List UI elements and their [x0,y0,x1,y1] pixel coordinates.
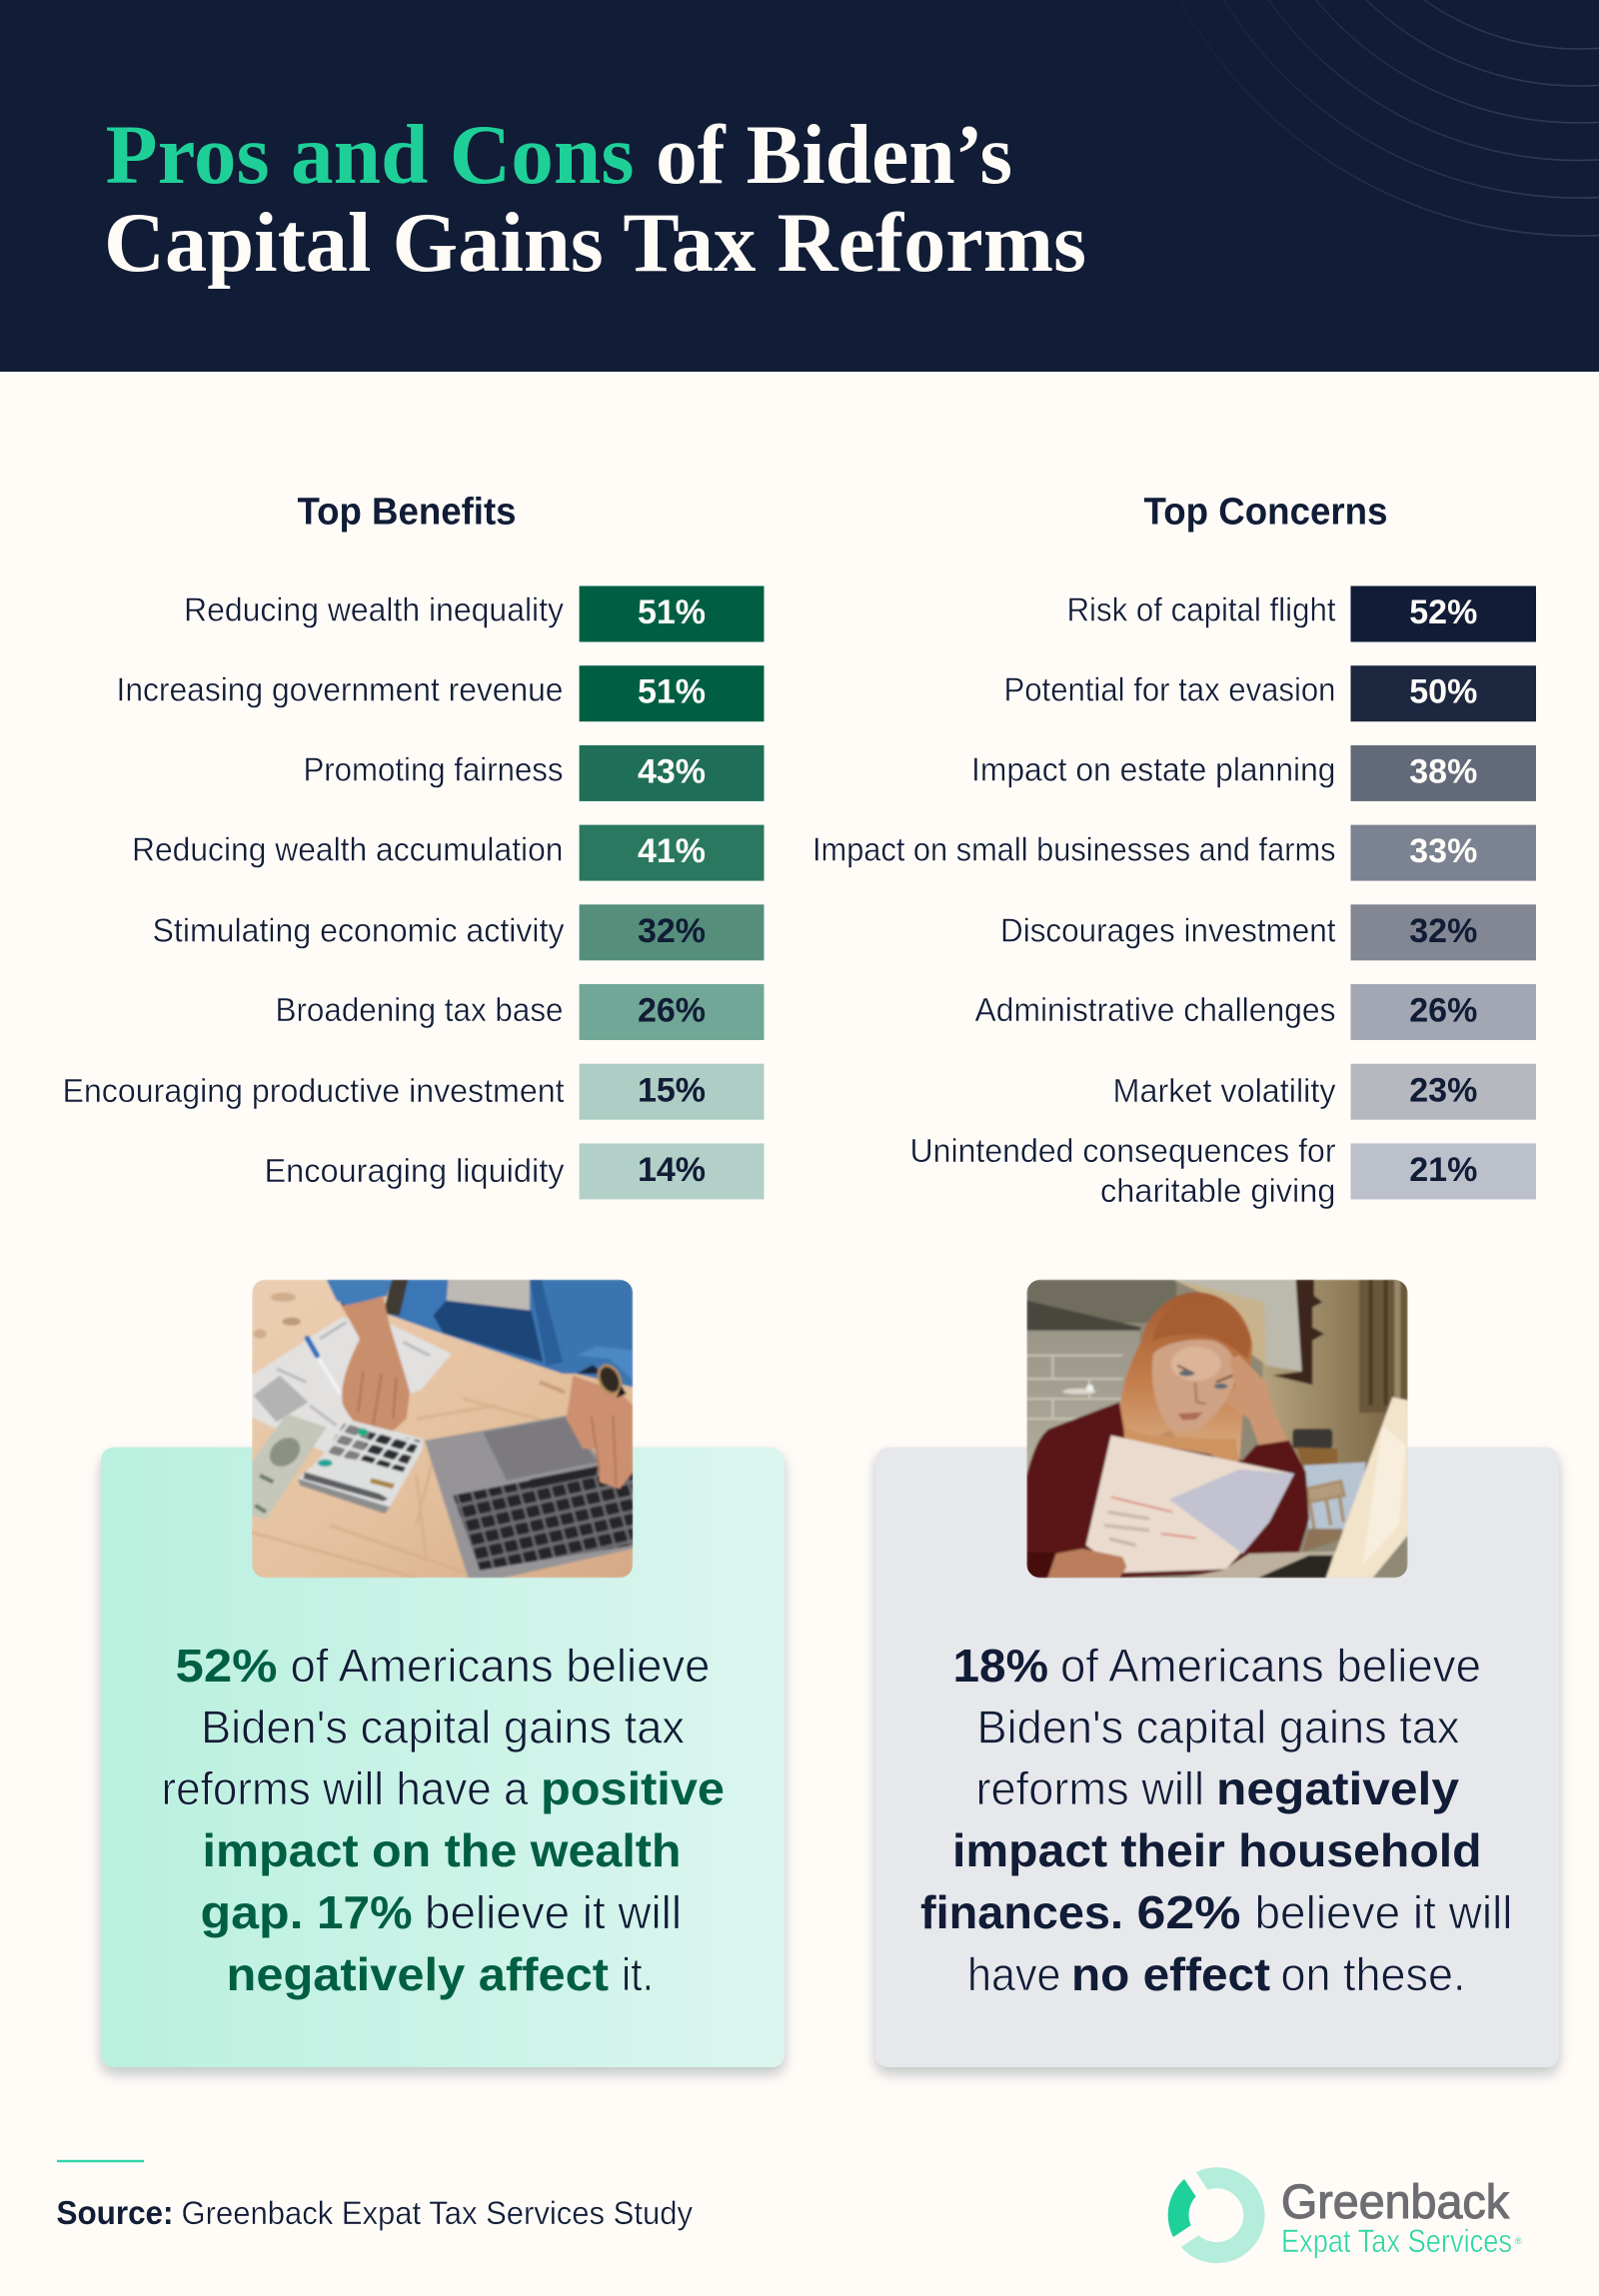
card text: 18% negative impact: on these. [1281,1948,1465,2000]
heading: top concerns: Top Concerns [1143,492,1387,534]
row: promoting fairness 43%: Promoting fairness [304,750,564,787]
photo: hands using calculator and laptop [250,1280,633,1578]
title: of Biden’s [656,108,1012,202]
card text: 18% negative impact: of Americans believe [1060,1640,1481,1692]
logo: Greenback Expat Tax Services [1168,2167,1522,2263]
row: promoting fairness 43%: 43% [638,753,706,791]
row: encouraging productive investment 15%: Encouraging productive investment [62,1072,564,1109]
panel: top concerns [812,492,1536,1209]
row: increasing government revenue 51%: 51% [638,673,706,711]
row: broadening tax base 26% [276,984,764,1040]
row: impact on estate planning 38%: 38% [1409,753,1477,791]
card background: green [101,1447,785,2067]
title: Capital Gains Tax Reforms [104,196,1086,290]
row: risk of capital flight 52%: Risk of capital flight [1067,590,1335,627]
row: administrative challenges 26%: Administrative challenges [975,991,1335,1028]
footer source [56,2160,693,2231]
row: potential for tax evasion 50%: 50% [1409,673,1477,711]
row: unintended consequences for charitable giving 21%: Unintended consequences for [909,1132,1336,1169]
card text: 52% positive impact: positive [541,1762,725,1814]
card background: grey [875,1447,1559,2067]
card text: 52% positive impact: believe it will [425,1886,682,1938]
row: risk of capital flight 52%: 52% [1409,593,1477,631]
row: encouraging liquidity 14%: 14% [638,1151,706,1189]
card text: 52% positive impact [162,1640,725,2000]
row: reducing wealth accumulation 41% [132,825,764,881]
row: impact on estate planning 38% [971,745,1536,801]
row: increasing government revenue 51%: Increasing government revenue [116,670,564,707]
row: risk of capital flight 52% [1067,585,1536,641]
row: market volatility 23% [1113,1064,1536,1120]
row: discourages investment 32%: 32% [1409,912,1477,950]
heading: top benefits: Top Benefits [298,492,516,534]
card text: 18% negative impact: 62% [1137,1886,1241,1938]
card text: 18% negative impact: no effect [1071,1948,1270,2000]
row: encouraging productive investment 15%: 15% [638,1071,706,1109]
card text: 18% negative impact [920,1640,1513,2000]
row: impact on estate planning 38%: Impact on estate planning [971,750,1335,787]
row: impact on small businesses and farms 33%: Impact on small businesses and farms [812,830,1335,867]
logo wordmark [1281,2176,1522,2259]
row: reducing wealth accumulation 41%: 41% [638,832,706,870]
panel: top benefits [62,492,764,1199]
row: reducing wealth inequality 51%: Reducing wealth inequality [184,590,564,627]
card text: 52% positive impact: gap. [200,1886,304,1938]
row: administrative challenges 26% [975,984,1536,1040]
row: promoting fairness 43% [304,745,764,801]
card text: 52% positive impact: Biden's capital gains tax [201,1701,685,1752]
card text: 18% negative impact: believe it will [1255,1886,1513,1938]
logo wordmark: ® [1515,2236,1522,2246]
header background [0,0,1599,372]
row: impact on small businesses and farms 33% [812,825,1536,881]
title [104,108,1086,290]
row: encouraging liquidity 14%: Encouraging liquidity [264,1152,565,1189]
row: discourages investment 32% [1000,904,1536,960]
panel: positive impact card [101,1280,785,2067]
row: market volatility 23%: Market volatility [1113,1072,1336,1109]
card text: 18% negative impact: finances. [920,1886,1123,1938]
row: reducing wealth accumulation 41%: Reducing wealth accumulation [132,830,564,867]
row: stimulating economic activity 32%: 32% [638,912,706,950]
row: potential for tax evasion 50%: Potential for tax evasion [1003,670,1335,707]
row: unintended consequences for charitable giving 21%: 21% [1409,1151,1477,1189]
row: encouraging liquidity 14% [264,1143,764,1199]
card text: 18% negative impact: 18% [953,1640,1048,1692]
card text: 18% negative impact: reforms will [975,1762,1204,1814]
row: encouraging productive investment 15% [62,1064,764,1120]
card text: 18% negative impact: have [967,1948,1061,2000]
card text: 18% negative impact: impact their household [952,1824,1481,1876]
row: administrative challenges 26%: 26% [1409,991,1477,1029]
logo wordmark: Greenback [1281,2176,1510,2229]
card text: 18% negative impact: negatively [1216,1762,1459,1814]
row: reducing wealth inequality 51%: 51% [638,593,706,631]
row: stimulating economic activity 32%: Stimulating economic activity [152,911,565,948]
row: potential for tax evasion 50% [1003,665,1536,721]
row: market volatility 23%: 23% [1409,1071,1477,1109]
card text: 52% positive impact: negatively affect [226,1948,609,2000]
row: reducing wealth inequality 51% [184,585,764,641]
card text: 52% positive impact: of Americans believe [290,1640,710,1692]
row: discourages investment 32%: Discourages investment [1000,911,1335,948]
row: broadening tax base 26%: 26% [638,991,706,1029]
source text: Greenback Expat Tax Services Study [182,2195,693,2231]
icon: logo ring [1168,2167,1265,2263]
card text: 52% positive impact: impact on the wealth [202,1824,682,1876]
row: broadening tax base 26%: Broadening tax base [276,991,564,1028]
card text: 18% negative impact: Biden's capital gains tax [977,1701,1459,1752]
card text: 52% positive impact: 52% [176,1640,278,1692]
header banner [0,0,1599,372]
row: increasing government revenue 51% [116,665,764,721]
card text: 52% positive impact: it. [622,1948,654,2000]
title: Pros and Cons [106,108,634,202]
panel: negative impact card [875,1280,1559,2067]
logo wordmark: Expat Tax Services [1281,2223,1512,2259]
card text: 52% positive impact: 17% [317,1886,412,1938]
card text: 52% positive impact: reforms will have a [162,1762,529,1814]
row: stimulating economic activity 32% [152,904,764,960]
row: impact on small businesses and farms 33%: 33% [1409,832,1477,870]
source text: Source: [56,2194,174,2231]
row: unintended consequences for charitable giving 21% [909,1132,1536,1209]
row: unintended consequences for charitable giving 21%: charitable giving [1100,1172,1335,1209]
photo: worried woman reading a document [1026,1280,1408,1578]
